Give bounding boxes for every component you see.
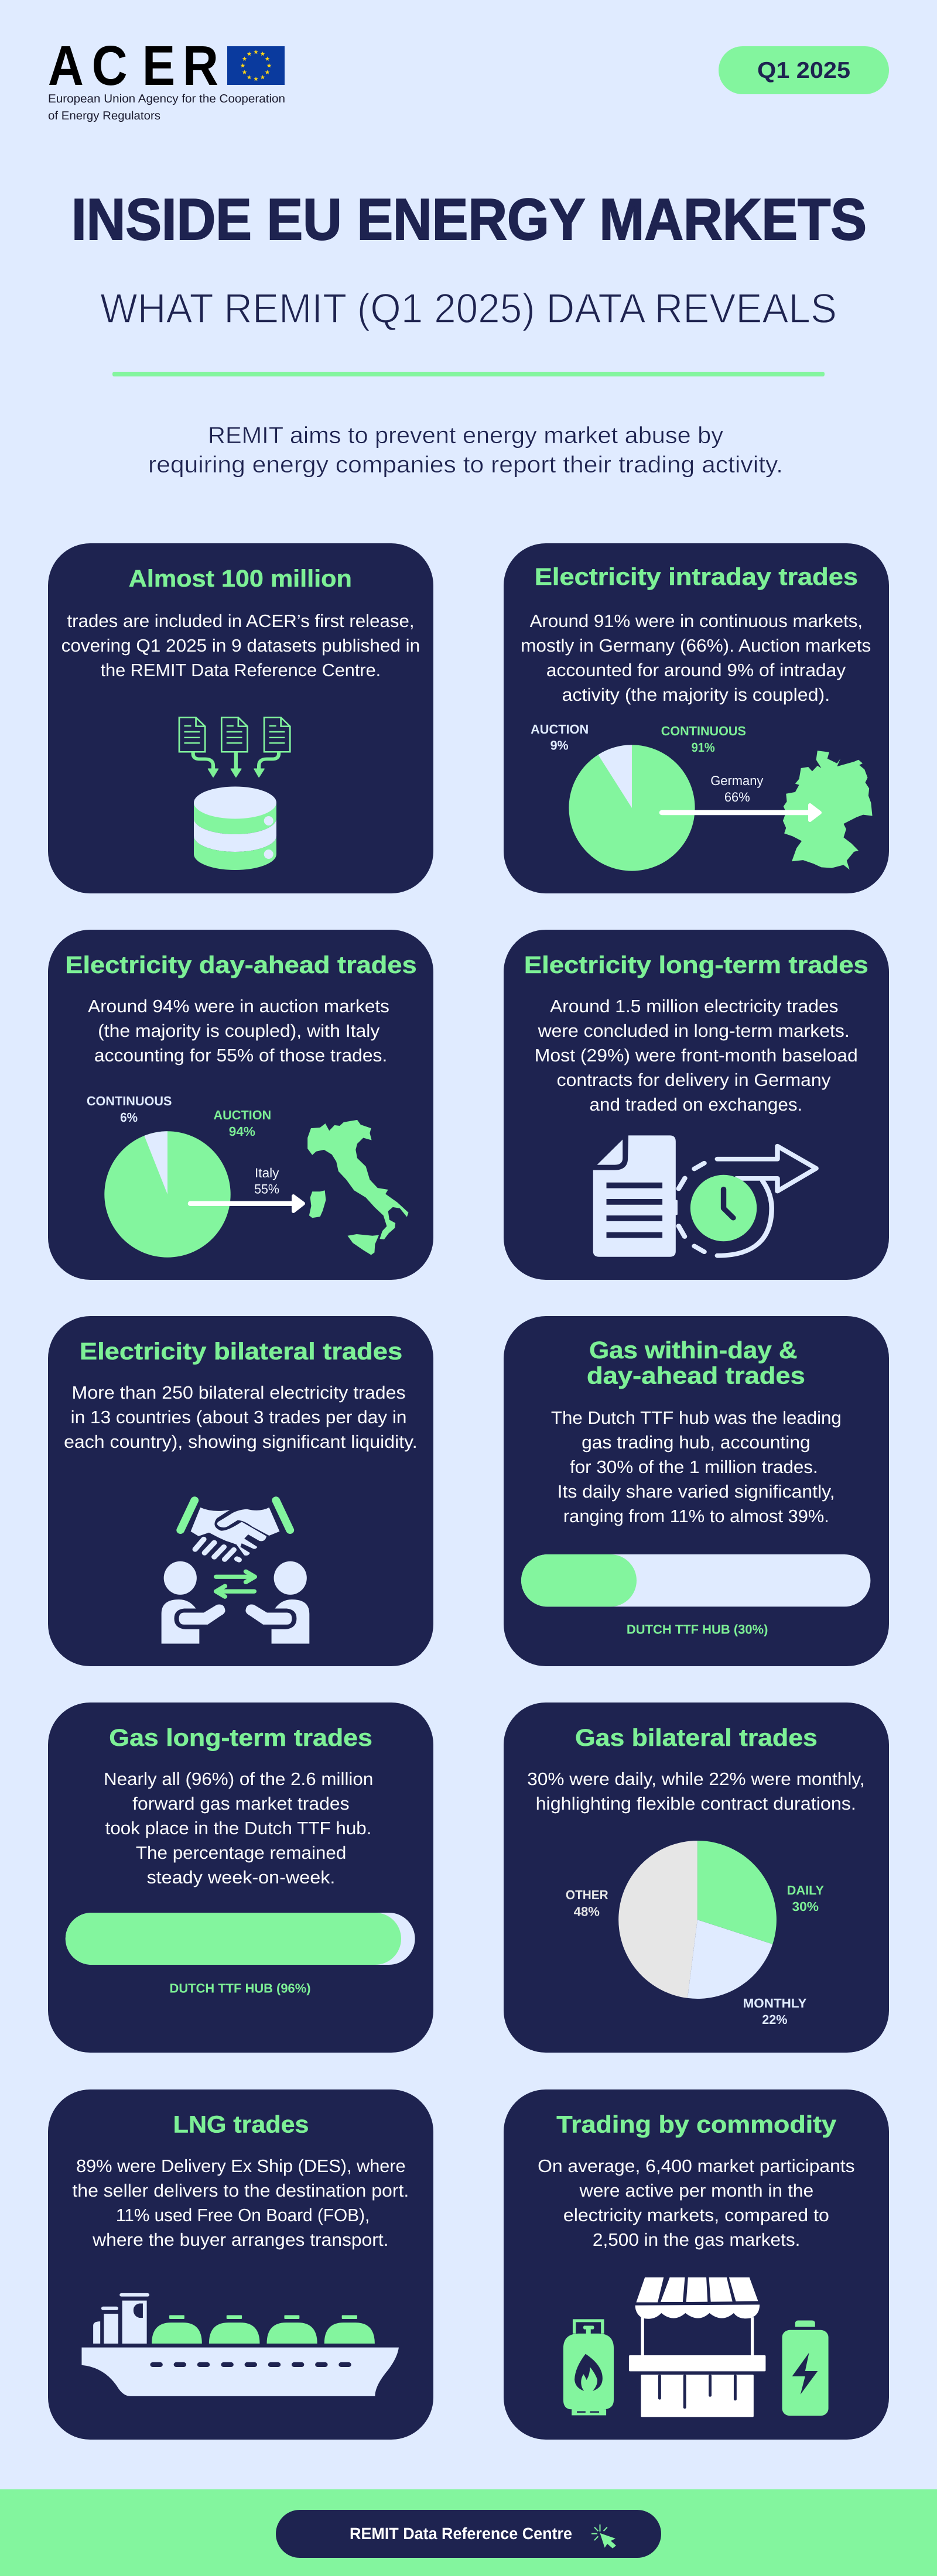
- subtitle: WHAT REMIT (Q1 2025) DATA REVEALS: [100, 286, 837, 332]
- label: monthly: [743, 1996, 807, 2027]
- body text: gas trading hub, accounting: [582, 1433, 811, 1453]
- body text: the REMIT Data Reference Centre.: [101, 660, 381, 680]
- body text: On average, 6,400 market participants: [538, 2156, 855, 2176]
- body text: ranging from 11% to almost 39%.: [563, 1506, 829, 1526]
- body text: The Dutch TTF hub was the leading: [551, 1408, 842, 1428]
- label: continuous: [87, 1094, 172, 1125]
- body text: where the buyer arranges transport.: [92, 2230, 389, 2250]
- body text: [61, 611, 420, 680]
- label: Germany 66%: 66%: [724, 790, 750, 804]
- body text: steady week-on-week.: [147, 1868, 335, 1888]
- label: Italy 55%: 55%: [254, 1182, 279, 1197]
- heading: [587, 1337, 805, 1389]
- label: daily: [787, 1883, 824, 1914]
- footer band: [0, 2489, 937, 2576]
- label: auction: [213, 1108, 271, 1139]
- heading: Gas bilateral trades: [575, 1724, 818, 1751]
- icon: LNG ship: [81, 2293, 399, 2396]
- button: REMIT Data Reference Centre: [276, 2510, 661, 2558]
- icon: gas cylinder: [563, 2321, 614, 2416]
- body text: (the majority is coupled), with Italy: [98, 1021, 380, 1041]
- body text: Around 1.5 million electricity trades: [550, 996, 839, 1016]
- label: Italy 55%: Italy: [255, 1166, 279, 1180]
- label: auction: 9%: [550, 738, 569, 753]
- body text: 2,500 in the gas markets.: [593, 2230, 800, 2250]
- body text: were concluded in long-term markets.: [538, 1021, 850, 1041]
- body text: activity (the majority is coupled).: [562, 685, 830, 705]
- label: auction: AUCTION: [213, 1108, 271, 1122]
- icon: database: [194, 787, 276, 870]
- quarter badge: [719, 46, 889, 94]
- icon: handshake and two people: [162, 1501, 309, 1644]
- panel: electricity long-term trades: [504, 930, 889, 1280]
- label: Italy 55%: [254, 1166, 279, 1197]
- bar label: DUTCH TTF HUB (96%): [170, 1981, 310, 1995]
- quarter badge: Q1 2025: [757, 58, 850, 83]
- body text: Around 91% were in continuous markets,: [530, 611, 863, 631]
- label: monthly: 22%: [762, 2012, 787, 2027]
- body text: Nearly all (96%) of the 2.6 million: [104, 1769, 373, 1789]
- button: REMIT Data Reference Centre: REMIT Data Reference Centre: [350, 2524, 572, 2543]
- label: other: 48%: [574, 1904, 600, 1919]
- logo: ACER: [48, 35, 285, 122]
- intro text: requiring energy companies to report their trading activity.: [148, 452, 783, 478]
- arrow: pie to Italy: [190, 1196, 303, 1211]
- heading: Gas long-term trades: [109, 1724, 372, 1751]
- logo: ACER: European Union Agency for the Cooperation: [48, 93, 285, 105]
- heading: LNG trades: [173, 2111, 309, 2138]
- label: monthly: MONTHLY: [743, 1996, 807, 2010]
- label: Germany 66%: Germany: [710, 773, 764, 788]
- body text: the seller delivers to the destination port.: [72, 2181, 409, 2201]
- title: INSIDE EU ENERGY MARKETS: [71, 187, 867, 252]
- body text: [538, 2156, 855, 2250]
- body text: accounted for around 9% of intraday: [546, 660, 846, 680]
- intro text: [148, 423, 783, 478]
- label: continuous: 91%: [692, 740, 715, 755]
- body text: for 30% of the 1 million trades.: [570, 1457, 818, 1477]
- body text: [64, 1383, 418, 1452]
- heading: Electricity bilateral trades: [80, 1338, 402, 1365]
- label: continuous: CONTINUOUS: [87, 1094, 172, 1108]
- panel: gas within-day and day-ahead trades: [504, 1316, 889, 1666]
- icon: battery: [782, 2320, 829, 2416]
- body text: each country), showing significant liquidity.: [64, 1432, 418, 1452]
- label: continuous: 6%: [120, 1110, 138, 1125]
- heading: day-ahead trades: [587, 1362, 805, 1389]
- label: daily: DAILY: [787, 1883, 824, 1897]
- pie chart: contract durations: [618, 1841, 777, 1999]
- pie chart: auction vs continuous: [104, 1131, 231, 1258]
- heading: Almost 100 million: [129, 565, 352, 592]
- heading: Electricity day-ahead trades: [65, 951, 417, 978]
- body text: 30% were daily, while 22% were monthly,: [527, 1769, 865, 1789]
- label: other: OTHER: [566, 1888, 608, 1902]
- body text: [551, 1408, 842, 1526]
- body text: took place in the Dutch TTF hub.: [105, 1818, 371, 1838]
- label: Germany 66%: [710, 773, 764, 804]
- body text: 89% were Delivery Ex Ship (DES), where: [76, 2156, 406, 2176]
- body text: electricity markets, compared to: [563, 2205, 829, 2225]
- progress bar: 30%: [521, 1554, 870, 1606]
- body text: trades are included in ACER’s first release,: [67, 611, 415, 631]
- body text: More than 250 bilateral electricity trades: [71, 1383, 406, 1403]
- logo: ACER: ACER: [48, 35, 218, 97]
- heading: Trading by commodity: [556, 2111, 836, 2138]
- body text: [104, 1769, 373, 1888]
- body text: highlighting flexible contract durations.: [536, 1794, 856, 1814]
- label: other: [566, 1888, 608, 1919]
- panel: almost 100 million: [48, 543, 433, 893]
- body text: [72, 2156, 409, 2250]
- bar label: DUTCH TTF HUB (30%): [627, 1622, 768, 1636]
- label: auction: [531, 722, 589, 753]
- body text: Its daily share varied significantly,: [558, 1482, 835, 1502]
- body text: Around 94% were in auction markets: [88, 996, 389, 1016]
- label: continuous: CONTINUOUS: [661, 724, 746, 738]
- body text: [527, 1769, 865, 1814]
- body text: mostly in Germany (66%). Auction markets: [521, 636, 871, 656]
- progress bar: 96%: [66, 1913, 415, 1965]
- logo: ACER: of Energy Regulators: [48, 109, 160, 122]
- body text: in 13 countries (about 3 trades per day in: [71, 1407, 406, 1427]
- body text: [521, 611, 871, 705]
- map: Germany: [783, 751, 873, 870]
- label: continuous: [661, 724, 746, 755]
- body text: The percentage remained: [136, 1843, 346, 1863]
- heading: Gas within-day &: [589, 1337, 798, 1364]
- intro text: REMIT aims to prevent energy market abuse by: [208, 423, 723, 448]
- body text: Most (29%) were front-month baseload: [535, 1046, 858, 1066]
- icon: contract document and clock: [593, 1135, 816, 1257]
- heading: Electricity long-term trades: [524, 951, 868, 978]
- body text: [88, 996, 389, 1066]
- panel: gas long-term trades: [48, 1703, 433, 2053]
- label: auction: 94%: [229, 1124, 255, 1139]
- body text: 11% used Free On Board (FOB),: [116, 2205, 370, 2225]
- panel: electricity bilateral trades: [48, 1316, 433, 1666]
- body text: contracts for delivery in Germany: [557, 1070, 831, 1090]
- body text: [535, 996, 858, 1115]
- body text: accounting for 55% of those trades.: [94, 1046, 387, 1066]
- panel: trading by commodity: [504, 2089, 889, 2440]
- icon: cursor click: [591, 2524, 616, 2548]
- icon: market stall: [629, 2277, 765, 2417]
- body text: forward gas market trades: [132, 1794, 350, 1814]
- label: daily: 30%: [792, 1899, 819, 1914]
- body text: covering Q1 2025 in 9 datasets published in: [61, 636, 420, 656]
- icon: documents flowing into database: [179, 718, 290, 777]
- panel: LNG trades: [48, 2089, 433, 2440]
- panel: electricity intraday trades: [504, 543, 889, 893]
- label: auction: AUCTION: [531, 722, 589, 737]
- pie chart: continuous vs auction: [569, 745, 695, 871]
- body text: were active per month in the: [579, 2181, 813, 2201]
- panel: electricity day-ahead trades: [48, 930, 433, 1280]
- heading: Electricity intraday trades: [535, 563, 858, 590]
- body text: and traded on exchanges.: [589, 1095, 802, 1115]
- panel: gas bilateral trades: [504, 1703, 889, 2053]
- map: Italy: [307, 1120, 409, 1255]
- arrow: pie to Germany: [662, 805, 820, 820]
